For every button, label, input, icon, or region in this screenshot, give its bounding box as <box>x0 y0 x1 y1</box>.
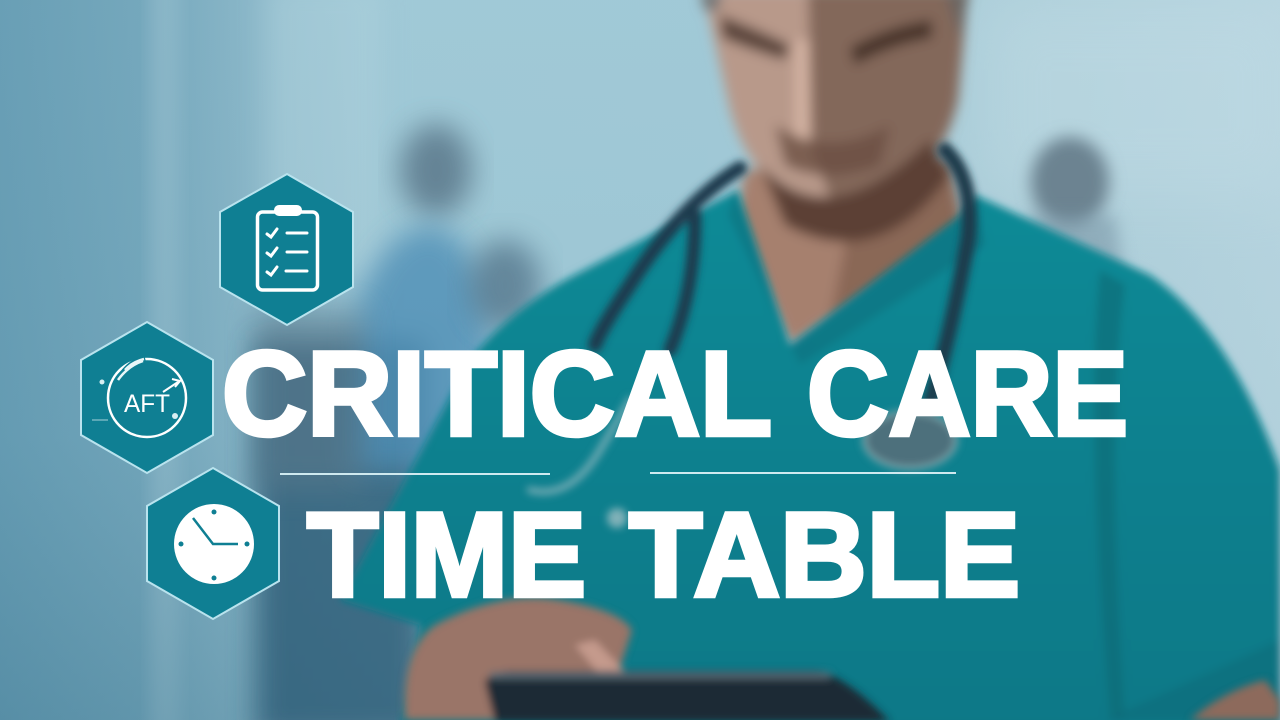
title line 2: TIME <box>307 488 586 622</box>
hand and tablet <box>404 598 1280 720</box>
neck and face <box>700 0 970 345</box>
title line 2 <box>307 488 1020 622</box>
blurred background colleagues <box>255 124 1125 490</box>
scrub top <box>340 190 1280 720</box>
title line 2: TABLE <box>629 488 1020 622</box>
title line 1 <box>222 327 1128 461</box>
hexagon icon: circular AFT badge: AFT <box>124 390 170 418</box>
divider lines <box>280 473 956 474</box>
title line 1: CRITICAL <box>222 327 772 461</box>
hexagon icon: clock <box>147 468 279 619</box>
stethoscope <box>530 150 969 528</box>
title line 1: CARE <box>807 327 1128 461</box>
hexagon icon: circular AFT badge <box>81 322 213 473</box>
hexagon icon: clipboard checklist <box>220 174 353 325</box>
nurse figure <box>340 0 1280 720</box>
